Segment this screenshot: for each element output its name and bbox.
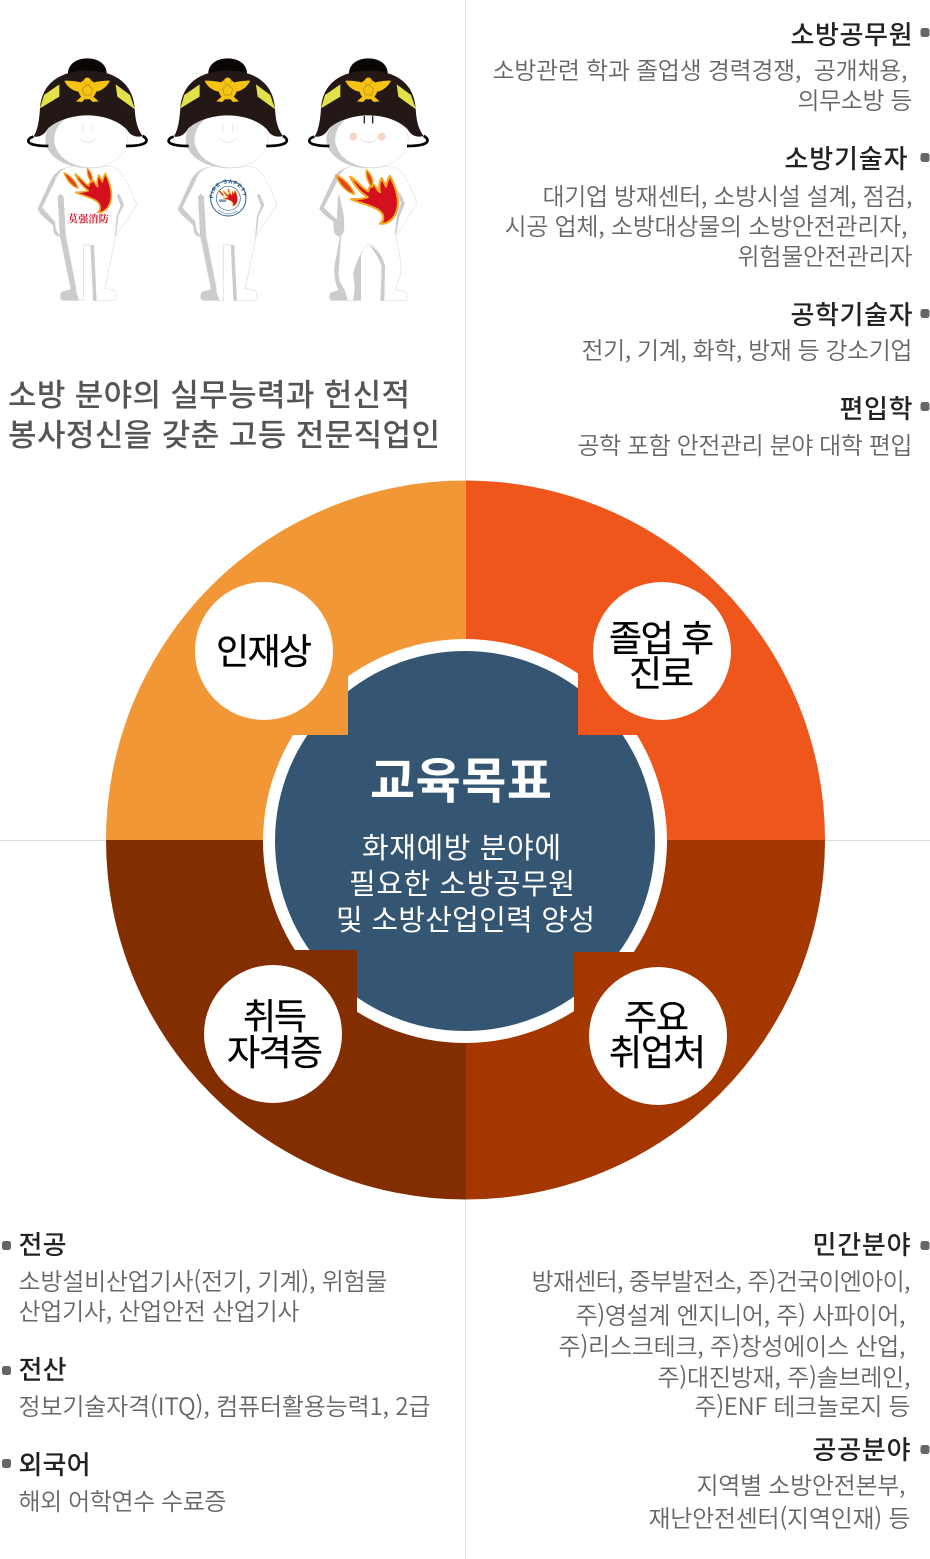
badge: 취득 자격증: 자격증: [227, 1024, 323, 1076]
item: 민간분야: 방재센터, 중부발전소, 주)건국이엔아이,: [532, 1262, 910, 1297]
mascot: firefighter with round badge: FIRE SAFETY: [209, 180, 247, 198]
blue centre disc: [275, 651, 655, 1031]
bottom right list: employers: [532, 1225, 930, 1534]
item: 외국어: 외국어: [18, 1445, 90, 1482]
centre description: 화재예방 분야에: [362, 825, 561, 867]
item: 민간분야: [532, 1225, 930, 1422]
badge: 취득 자격증: 취득: [243, 988, 307, 1040]
left tagline: [8, 370, 440, 455]
item: 민간분야: 주)대진방재, 주)솔브레인,: [658, 1358, 910, 1393]
item: 민간분야: 주)리스크테크, 주)창성에이스 산업,: [558, 1327, 906, 1362]
item: 소방기술자: 위험물안전관리자: [738, 237, 912, 272]
item: 전공: 소방설비산업기사(전기, 기계), 위험물: [18, 1262, 388, 1297]
item: 편입학: 공학 포함 안전관리 분야 대학 편입: [578, 426, 912, 461]
item: 소방기술자: 대기업 방재센터, 소방시설 설계, 점검,: [542, 177, 912, 212]
quadrant: orange top-left: [106, 480, 466, 840]
tab: brown corner: [262, 950, 357, 1045]
item: 전공: 전공: [18, 1225, 66, 1262]
badge: 주요 취업처: 취업처: [609, 1024, 706, 1076]
quadrant: rust bottom-right: [466, 840, 825, 1200]
item: 소방공무원: 의무소방 등: [798, 81, 912, 116]
central circular diagram: [106, 480, 825, 1200]
item: 편입학: [578, 389, 930, 461]
item: 전공: 산업기사, 산업안전 산업기사: [18, 1292, 300, 1327]
mascot: firefighter with Chinese logo: 莫强消防: [68, 212, 109, 226]
item: 전공: [2, 1225, 388, 1327]
item: 민간분야: 민간분야: [812, 1225, 911, 1262]
item: 전산: 정보기술자격(ITQ), 컴퓨터활용능력1, 2급: [18, 1387, 430, 1422]
badge: 인재상: 인재상: [216, 623, 312, 675]
item: 외국어: [2, 1445, 226, 1517]
top right list: career paths: [492, 15, 930, 461]
item: 편입학: 편입학: [840, 389, 913, 426]
item: 소방기술자: [504, 139, 930, 272]
item: 소방공무원: 소방관련 학과 졸업생 경력경쟁, 공개채용,: [492, 51, 908, 86]
tab: rust corner: [574, 952, 668, 1045]
tab: red-orange corner: [578, 636, 668, 735]
mascot: firefighter with Chinese logo: [28, 58, 146, 301]
badge: 졸업 후 진로: [593, 582, 731, 720]
quadrant: red-orange top-right: [466, 480, 825, 840]
tab: orange corner: [262, 636, 348, 735]
left tagline: 소방 분야의 실무능력과 헌신적: [8, 370, 410, 415]
item: 민간분야: 주)영설계 엔지니어, 주) 사파이어,: [576, 1296, 906, 1331]
mascot: firefighter with large flame: [309, 58, 427, 301]
item: 공학기술자: [582, 295, 930, 366]
heading: 교육목표: 교육목표: [370, 742, 552, 813]
item: 공공분야: [648, 1430, 930, 1534]
item: 공학기술자: 공학기술자: [790, 295, 913, 332]
mascot: firefighter with round badge: [167, 58, 288, 301]
badge: 주요 취업처: 주요: [624, 989, 689, 1041]
item: 소방공무원: 소방공무원: [790, 15, 912, 52]
centre description: [336, 825, 595, 939]
white ring: [263, 639, 667, 1043]
item: 소방기술자: 소방기술자: [784, 139, 908, 176]
item: 공공분야: 재난안전센터(지역인재) 등: [648, 1499, 910, 1534]
badge: 졸업 후 진로: 진로: [629, 645, 694, 697]
item: 민간분야: 주)ENF 테크놀로지 등: [694, 1387, 910, 1422]
item: 소방공무원: [492, 15, 930, 116]
item: 공공분야: 공공분야: [812, 1430, 911, 1467]
item: 전산: [2, 1350, 430, 1422]
item: 외국어: 해외 어학연수 수료증: [18, 1482, 226, 1517]
item: 공학기술자: 전기, 기계, 화학, 방재 등 강소기업: [582, 331, 912, 366]
item: 전산: 전산: [18, 1350, 67, 1387]
badge: 인재상: [195, 582, 333, 720]
quadrant: brown bottom-left: [106, 840, 466, 1200]
centre description: 필요한 소방공무원: [349, 861, 575, 903]
item: 공공분야: 지역별 소방안전본부,: [696, 1466, 906, 1501]
bottom left list: certificates: [2, 1225, 430, 1517]
badge: 주요 취업처: [589, 967, 727, 1105]
left tagline: 봉사정신을 갖춘 고등 전문직업인: [8, 410, 440, 455]
badge: 졸업 후 진로: 졸업 후: [609, 610, 714, 662]
centre description: 및 소방산업인력 양성: [336, 897, 595, 939]
item: 소방기술자: 시공 업체, 소방대상물의 소방안전관리자,: [504, 207, 908, 242]
badge: 취득 자격증: [204, 965, 342, 1103]
